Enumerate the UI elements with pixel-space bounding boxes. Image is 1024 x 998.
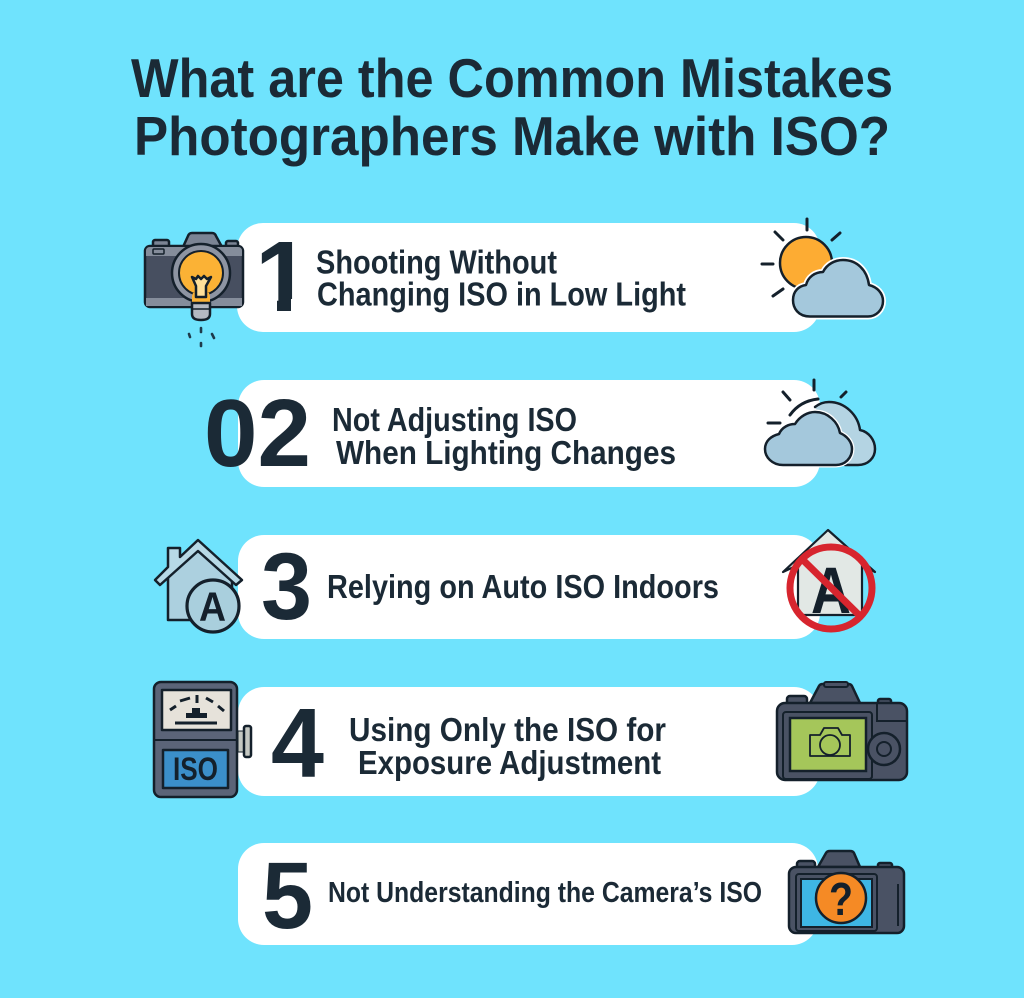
panel: mistake 4: [154, 682, 907, 798]
icon: light meter with ISO display: ISO: [173, 751, 218, 787]
mistake 5 text: Not Understanding the Camera’s ISO: [328, 877, 762, 909]
card 1 background: [237, 223, 820, 332]
mistake 2 text: [332, 401, 676, 471]
number 4: 4: [271, 688, 324, 798]
small camera glyph on screen: [810, 728, 850, 756]
icon: camera with light bulb: [145, 233, 243, 346]
icon: house with auto badge: A: [199, 584, 226, 630]
icon: camera with question mark: ?: [829, 873, 853, 925]
mistake 4 text: [349, 711, 666, 781]
icon: light meter with ISO display: [154, 682, 251, 797]
number 3: 3: [261, 534, 312, 640]
panel: mistake 2: [204, 380, 875, 487]
mistake 1 text: [316, 244, 686, 312]
title: Photographers Make with ISO?: [134, 105, 890, 167]
mistake 1 text: Shooting Without: [316, 244, 557, 280]
icon: clouds covering sun: [765, 380, 875, 465]
number 1: 1: [255, 221, 311, 333]
icon: crossed out auto house: A: [811, 553, 851, 627]
panel: mistake 1: [145, 219, 883, 346]
card 2 background: [238, 380, 820, 487]
card 3 background: [238, 535, 820, 639]
number 02: 02: [204, 380, 311, 487]
card 5 background: [238, 843, 818, 945]
panel: mistake 3: [155, 530, 875, 640]
icon: sun behind cloud: [762, 219, 883, 316]
mistake 2 text: When Lighting Changes: [336, 434, 676, 471]
mistake 4 text: Using Only the ISO for: [349, 711, 666, 748]
mistake 3 text: Relying on Auto ISO Indoors: [327, 568, 719, 605]
title: [131, 47, 893, 167]
mistake 1 text: Changing ISO in Low Light: [317, 276, 686, 312]
card 4 background: [238, 687, 820, 796]
number 5: 5: [262, 843, 313, 949]
panel: mistake 5: [238, 843, 904, 949]
icon: house with auto badge: [155, 540, 242, 632]
icon: camera with green screen: [777, 682, 907, 780]
icon: camera with question mark: [789, 851, 904, 933]
mistake 2 text: Not Adjusting ISO: [332, 401, 577, 438]
title: What are the Common Mistakes: [131, 47, 893, 109]
icon: crossed out auto house: [783, 530, 875, 629]
mistake 4 text: Exposure Adjustment: [358, 744, 661, 781]
